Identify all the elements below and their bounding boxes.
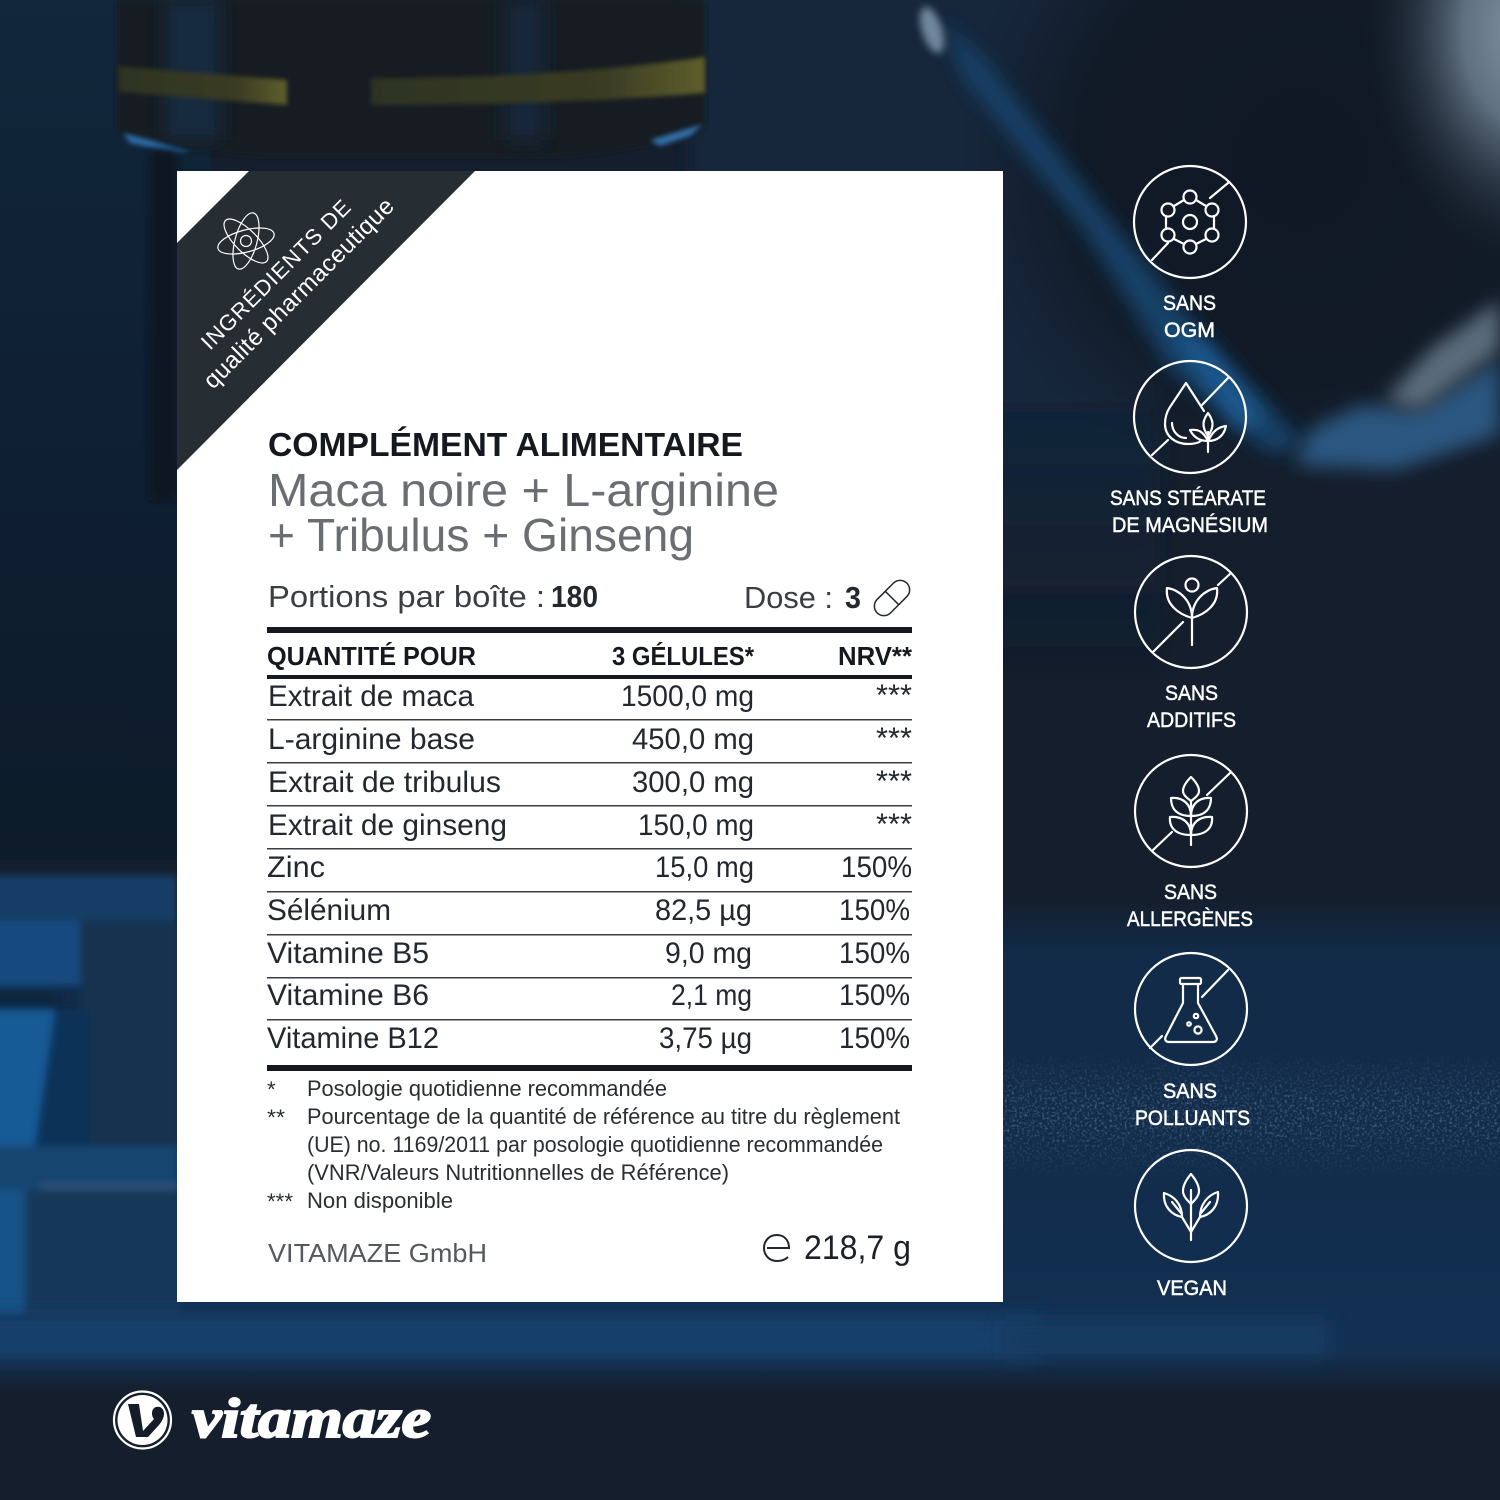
- row: zinc: 150%: [841, 851, 912, 884]
- product name: Maca noire + L-arginine: [268, 464, 779, 516]
- table header: [267, 641, 913, 671]
- footnotes: *: [267, 1077, 276, 1102]
- row: vitamin B12: 3,75 µg: [659, 1022, 752, 1055]
- footnotes: **: [267, 1105, 285, 1130]
- row: selenium: [267, 894, 910, 927]
- heading: COMPLÉMENT ALIMENTAIRE: [268, 426, 743, 463]
- ribbon text line 1: INGRÉDIENTS DE: [196, 195, 356, 355]
- footnotes: ***: [267, 1189, 293, 1214]
- row: ginseng: ***: [876, 808, 912, 841]
- row: ginseng: [268, 808, 912, 842]
- label: [1147, 682, 1236, 732]
- table header: NRV**: [838, 641, 913, 671]
- row: tribulus: Extrait de tribulus: [268, 766, 501, 799]
- out-of-focus streak: [940, 20, 1305, 455]
- badge: sans additifs: [1135, 556, 1247, 732]
- logo: vitamaze: [114, 1388, 431, 1450]
- badge: vegan: [1135, 1150, 1247, 1300]
- footnotes: (UE) no. 1169/2011 par posologie quotidienne recommandée: [307, 1132, 883, 1157]
- footnotes: Non disponible: [307, 1188, 453, 1213]
- row: vitamin B6: Vitamine B6: [267, 979, 429, 1012]
- icon: flask crossed out: [1135, 953, 1247, 1065]
- bottle: [117, 0, 705, 500]
- icon: molecule crossed out: [1134, 166, 1246, 278]
- company name: VITAMAZE GmbH: [268, 1238, 487, 1268]
- table header: 3 GÉLULES*: [612, 641, 755, 671]
- row: arginine: 450,0 mg: [632, 723, 754, 756]
- row: vitamin B5: Vitamine B5: [267, 937, 429, 970]
- row: arginine: [268, 722, 912, 756]
- row: ginseng: 150,0 mg: [638, 809, 754, 842]
- row: vitamin B6: 2,1 mg: [671, 979, 752, 1012]
- portions per box: 180: [551, 579, 598, 614]
- row: vitamin B5: [267, 937, 910, 970]
- icon: estimated sign: [764, 1235, 789, 1261]
- footnotes: [267, 1076, 900, 1214]
- label: DE MAGNÉSIUM: [1112, 514, 1268, 537]
- product name: [268, 464, 779, 561]
- label: SANS STÉARATE: [1110, 487, 1266, 510]
- label: [1163, 292, 1216, 342]
- row: maca: Extrait de maca: [268, 680, 474, 713]
- label: [1135, 1080, 1250, 1130]
- badge: sans allergènes: [1127, 755, 1253, 931]
- icon: oil drop with plant crossed out: [1134, 361, 1246, 473]
- row: vitamin B6: [267, 979, 910, 1012]
- row: tribulus: [268, 765, 912, 799]
- icon: wheat crossed out: [1135, 755, 1247, 867]
- label: SANS: [1163, 292, 1216, 315]
- panel: nutrition facts card: [177, 171, 1003, 1302]
- footnotes: Pourcentage de la quantité de référence au titre du règlement: [307, 1104, 900, 1129]
- label: [1127, 881, 1253, 931]
- label: SANS: [1165, 682, 1218, 705]
- row: selenium: Sélénium: [267, 894, 391, 927]
- label: ALLERGÈNES: [1127, 908, 1253, 931]
- ribbon: pharmaceutical quality: [177, 171, 475, 470]
- badge: sans stéarate de magnésium: [1110, 361, 1268, 537]
- row: maca: [268, 679, 912, 713]
- badge: sans OGM: [1134, 166, 1246, 342]
- row: vitamin B12: Vitamine B12: [267, 1022, 439, 1055]
- icon: logo emblem: [114, 1392, 171, 1448]
- row: zinc: 15,0 mg: [655, 851, 754, 884]
- label: SANS: [1163, 1080, 1217, 1103]
- row: tribulus: 300,0 mg: [632, 766, 754, 799]
- icon: three-leaf plant: [1135, 1150, 1247, 1262]
- row: maca: ***: [876, 679, 912, 712]
- dose: 3: [845, 580, 861, 615]
- footnotes: (VNR/Valeurs Nutritionnelles de Référence): [307, 1160, 729, 1185]
- footnotes: Posologie quotidienne recommandée: [307, 1076, 667, 1101]
- row: arginine: ***: [876, 722, 912, 755]
- label: SANS: [1164, 881, 1217, 904]
- icon: atom: [215, 210, 277, 272]
- table: nutrition values: [267, 627, 913, 1071]
- row: vitamin B12: 150%: [839, 1022, 910, 1055]
- row: arginine: L-arginine base: [268, 723, 475, 756]
- row: tribulus: ***: [876, 765, 912, 798]
- row: vitamin B12: [267, 1022, 910, 1055]
- table header: QUANTITÉ POUR: [267, 641, 476, 671]
- row: ginseng: Extrait de ginseng: [268, 809, 507, 842]
- row: selenium: 82,5 µg: [655, 894, 752, 927]
- label: VEGAN: [1157, 1277, 1227, 1300]
- icon: sprout crossed out: [1135, 556, 1247, 668]
- row: maca: 1500,0 mg: [621, 680, 754, 713]
- product name: + Tribulus + Ginseng: [268, 509, 694, 561]
- dose: Dose :: [744, 580, 833, 615]
- lower blue surface: [0, 870, 1500, 1400]
- net weight: 218,7 g: [804, 1229, 911, 1267]
- row: zinc: Zinc: [267, 851, 325, 884]
- label: ADDITIFS: [1147, 709, 1236, 732]
- row: vitamin B5: 9,0 mg: [665, 937, 752, 970]
- badge: sans polluants: [1135, 953, 1250, 1130]
- row: vitamin B6: 150%: [839, 979, 910, 1012]
- row: selenium: 150%: [839, 894, 910, 927]
- label: [1110, 487, 1268, 537]
- row: vitamin B5: 150%: [839, 937, 910, 970]
- portions per box: Portions par boîte :: [268, 579, 545, 614]
- label: POLLUANTS: [1135, 1107, 1250, 1130]
- ribbon text line 2: qualité pharmaceutique: [198, 193, 400, 394]
- net weight: [764, 1229, 911, 1267]
- wordmark: vitamaze: [192, 1388, 431, 1450]
- sparkling surface: [1003, 1058, 1500, 1172]
- icon: capsule: [870, 576, 914, 620]
- row: zinc: [267, 851, 912, 884]
- label: OGM: [1164, 319, 1215, 342]
